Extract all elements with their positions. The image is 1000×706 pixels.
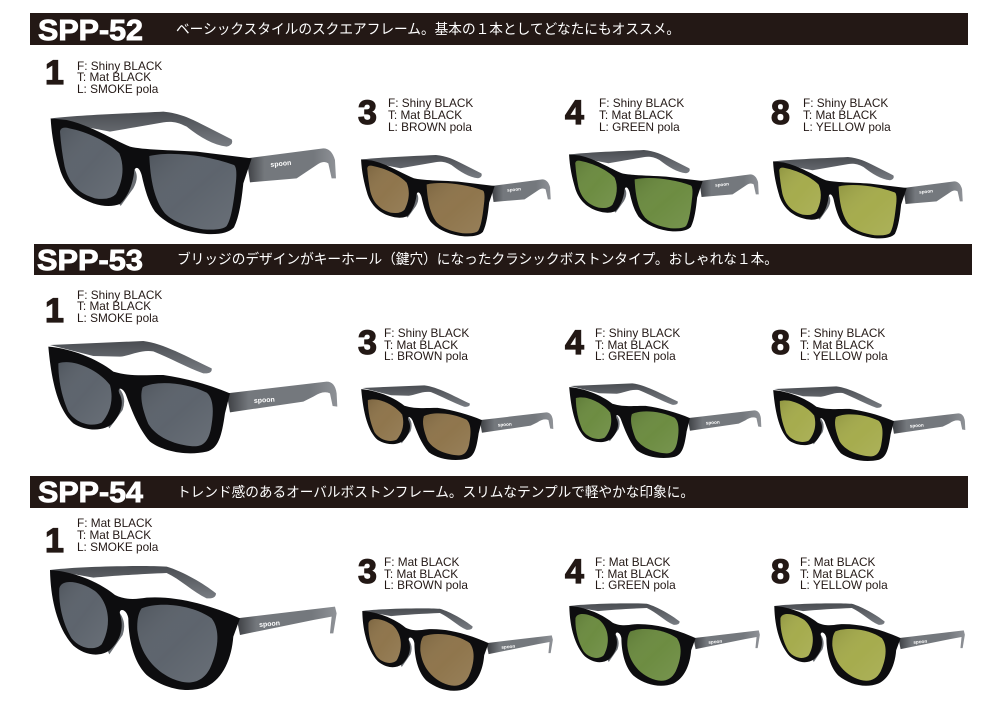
sunglasses: SPP-54 smoke: spoon bbox=[259, 620, 280, 629]
variant 3 label: 3 bbox=[358, 324, 377, 362]
variant 8 label: F: Mat BLACK bbox=[800, 555, 876, 569]
variant 8 label: T: Mat BLACK bbox=[803, 108, 877, 122]
variant 4 label: T: Mat BLACK bbox=[595, 338, 669, 352]
sunglasses: SPP-53 brown: spoon bbox=[498, 422, 512, 428]
variant 1 label: L: SMOKE pola bbox=[77, 311, 159, 325]
sunglasses: SPP-53 brown bbox=[361, 385, 553, 460]
variant 3 label: F: Shiny BLACK bbox=[388, 96, 473, 110]
variant 8 label: 8 bbox=[771, 94, 790, 132]
variant 8 label: L: YELLOW pola bbox=[800, 349, 888, 363]
variant 3 label: L: BROWN pola bbox=[384, 578, 468, 592]
variant 1 label: F: Mat BLACK bbox=[77, 516, 153, 530]
variant 3 label: T: Mat BLACK bbox=[384, 567, 458, 581]
sunglasses: SPP-53 smoke bbox=[48, 341, 337, 453]
variant 8 label: F: Shiny BLACK bbox=[800, 326, 885, 340]
variant 4 label: T: Mat BLACK bbox=[599, 108, 673, 122]
section: SPP-53 bbox=[34, 244, 972, 461]
sunglasses: SPP-54 brown: spoon bbox=[501, 644, 516, 650]
variant 8 label: T: Mat BLACK bbox=[800, 567, 874, 581]
sunglasses: SPP-54 green: spoon bbox=[708, 639, 723, 645]
variant 3 label bbox=[358, 324, 469, 363]
header bar: SPP-53: ブリッジのデザインがキーホール（鍵穴）になったクラシックボストンタイプ。おしゃれな１本。 bbox=[177, 251, 778, 267]
header bar: SPP-53 bbox=[34, 244, 972, 277]
variant 1 label bbox=[45, 54, 162, 96]
sunglasses: SPP-54 brown bbox=[362, 608, 553, 691]
variant 4 label bbox=[565, 553, 676, 592]
header bar: SPP-52 bbox=[30, 13, 968, 47]
variant 4 label: L: GREEN pola bbox=[599, 120, 680, 134]
variant 1 label bbox=[45, 288, 162, 330]
header bar: SPP-52: SPP-52 bbox=[38, 15, 143, 47]
variant 1 label: T: Mat BLACK bbox=[77, 70, 151, 84]
variant 8 label: 8 bbox=[771, 324, 790, 362]
variant 1 label bbox=[45, 516, 159, 560]
section: SPP-52 bbox=[30, 13, 968, 238]
sunglasses: SPP-53 yellow bbox=[773, 386, 965, 461]
variant 3 label: F: Shiny BLACK bbox=[384, 326, 469, 340]
sunglasses: SPP-52 yellow bbox=[773, 157, 963, 238]
sunglasses: SPP-52 smoke: spoon bbox=[270, 160, 292, 169]
sunglasses: SPP-53 yellow: spoon bbox=[910, 423, 924, 429]
variant 8 label: L: YELLOW pola bbox=[803, 120, 891, 134]
sunglasses: SPP-54 yellow bbox=[774, 603, 965, 686]
header bar: SPP-53: SPP-53 bbox=[37, 245, 143, 277]
variant 3 label: L: BROWN pola bbox=[388, 120, 472, 134]
sunglasses: SPP-53 green bbox=[569, 383, 761, 458]
variant 4 label: F: Shiny BLACK bbox=[595, 326, 680, 340]
sunglasses: SPP-54 smoke bbox=[50, 566, 337, 690]
variant 8 label: L: YELLOW pola bbox=[800, 578, 888, 592]
variant 3 label bbox=[358, 553, 468, 592]
variant 1 label: 1 bbox=[45, 292, 64, 330]
variant 4 label bbox=[565, 324, 680, 363]
variant 1 label: T: Mat BLACK bbox=[77, 528, 151, 542]
variant 8 label: 8 bbox=[771, 553, 790, 591]
variant 4 label: L: GREEN pola bbox=[595, 349, 676, 363]
variant 1 label: 1 bbox=[45, 54, 64, 92]
variant 1 label: F: Shiny BLACK bbox=[77, 59, 162, 73]
sunglasses: SPP-52 smoke bbox=[51, 112, 336, 234]
header bar: SPP-52: ベーシックスタイルのスクエアフレーム。基本の１本としてどなたにもオススメ。 bbox=[176, 21, 680, 37]
variant 4 label: L: GREEN pola bbox=[595, 578, 676, 592]
variant 1 label: L: SMOKE pola bbox=[77, 82, 159, 96]
variant 8 label bbox=[771, 94, 891, 134]
sunglasses: SPP-52 green: spoon bbox=[715, 181, 729, 188]
header bar: SPP-54 bbox=[30, 476, 968, 509]
sunglasses: SPP-52 green bbox=[569, 150, 759, 231]
variant 1 label: F: Shiny BLACK bbox=[77, 288, 162, 302]
variant 8 label bbox=[771, 324, 888, 363]
variant 1 label: L: SMOKE pola bbox=[77, 540, 159, 554]
variant 4 label: F: Shiny BLACK bbox=[599, 96, 684, 110]
sunglasses: SPP-53 smoke: spoon bbox=[254, 397, 275, 405]
variant 4 label: F: Mat BLACK bbox=[595, 555, 671, 569]
variant 8 label: F: Shiny BLACK bbox=[803, 96, 888, 110]
variant 3 label: 3 bbox=[358, 94, 377, 132]
sunglasses: SPP-54 green bbox=[569, 603, 760, 686]
sunglasses: SPP-52 yellow: spoon bbox=[919, 188, 933, 195]
variant 4 label: 4 bbox=[565, 94, 584, 132]
variant 4 label bbox=[565, 94, 684, 134]
sunglasses: SPP-52 brown bbox=[361, 155, 551, 236]
variant 4 label: T: Mat BLACK bbox=[595, 567, 669, 581]
header bar: SPP-54: トレンド感のあるオーバルボストンフレーム。スリムなテンプルで軽やかな印象に。 bbox=[177, 484, 694, 500]
variant 3 label bbox=[358, 94, 473, 134]
variant 1 label: 1 bbox=[45, 522, 64, 560]
sunglasses: SPP-54 yellow: spoon bbox=[913, 639, 928, 645]
variant 4 label: 4 bbox=[565, 553, 584, 591]
section: SPP-54 bbox=[30, 476, 968, 691]
sunglasses: SPP-53 green: spoon bbox=[706, 420, 720, 426]
variant 3 label: T: Mat BLACK bbox=[384, 338, 458, 352]
variant 3 label: F: Mat BLACK bbox=[384, 555, 460, 569]
variant 1 label: T: Mat BLACK bbox=[77, 299, 151, 313]
variant 3 label: 3 bbox=[358, 553, 377, 591]
variant 3 label: L: BROWN pola bbox=[384, 349, 468, 363]
header bar: SPP-54: SPP-54 bbox=[38, 477, 143, 509]
variant 3 label: T: Mat BLACK bbox=[388, 108, 462, 122]
sunglasses: SPP-52 brown: spoon bbox=[507, 186, 521, 193]
variant 4 label: 4 bbox=[565, 324, 584, 362]
variant 8 label: T: Mat BLACK bbox=[800, 338, 874, 352]
variant 8 label bbox=[771, 553, 888, 592]
